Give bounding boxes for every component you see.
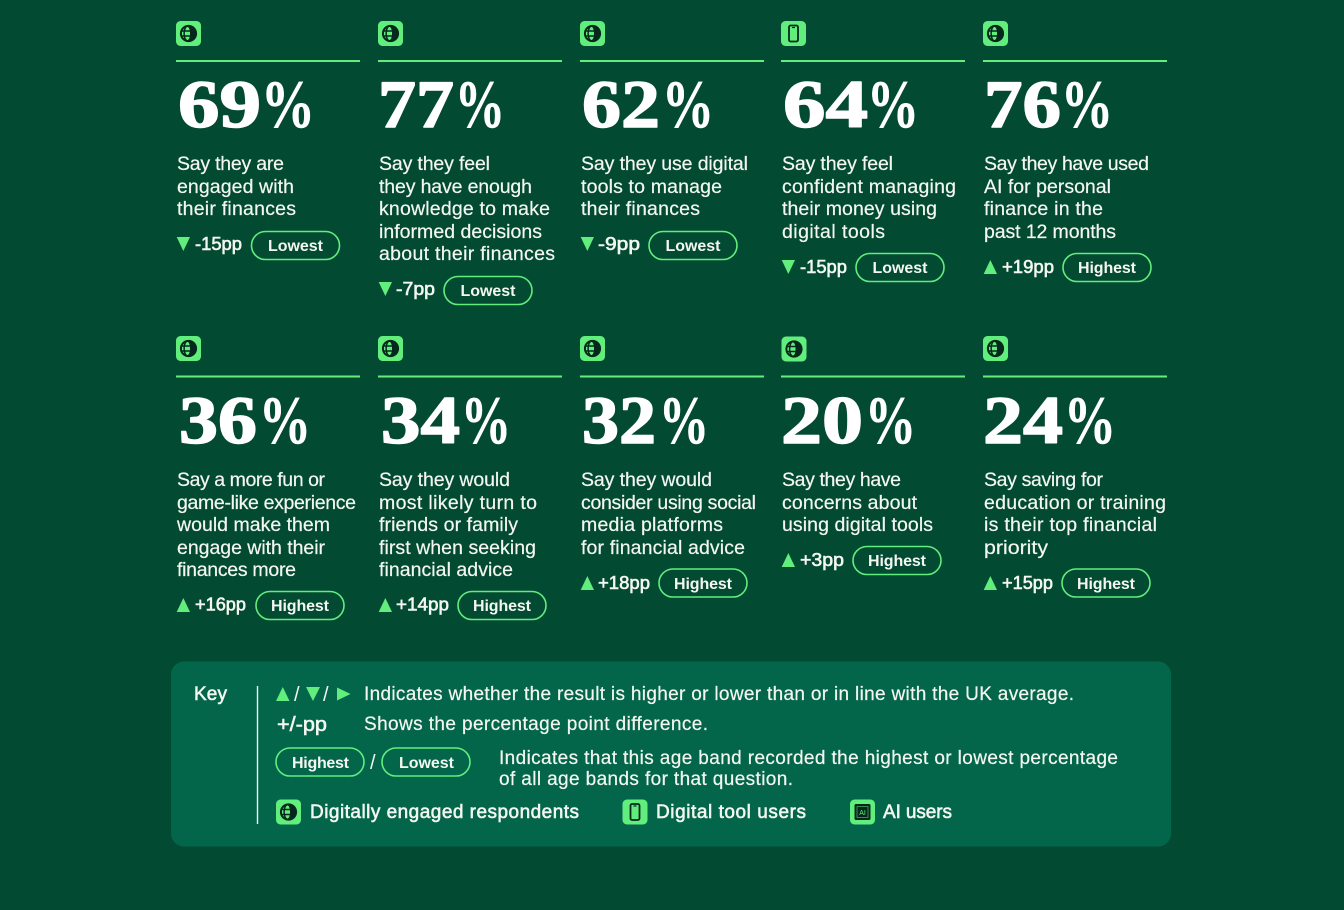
percentage: 34%: 34 (381, 382, 460, 458)
percentage: 34% (381, 382, 511, 458)
key text: badges: Indicates that this age band recorded the highest or lowest percentage (499, 748, 1118, 769)
badge: Lowest: Lowest (666, 238, 721, 255)
description: their finances (177, 198, 296, 220)
difference: +14pp: +14pp (396, 594, 449, 614)
percentage: 24% (983, 382, 1116, 458)
description: financial advice (379, 559, 513, 581)
key heading: Key (194, 684, 228, 705)
percentage: 20% (781, 382, 916, 458)
badge: Highest (853, 546, 941, 574)
badge: Lowest: Lowest (872, 260, 928, 277)
percentage: 64%: 64 (783, 66, 868, 142)
badge: Highest: Highest (271, 598, 330, 615)
difference: +15pp: +15pp (1002, 573, 1053, 593)
badge: Highest (659, 569, 747, 597)
badge: Lowest (649, 232, 737, 260)
stat card: 77% knowledge (378, 21, 562, 304)
difference: +19pp: +19pp (1002, 257, 1054, 277)
percentage: 77% (378, 66, 505, 142)
description (782, 153, 956, 243)
difference: +18pp: +18pp (598, 573, 650, 593)
badge: Lowest (444, 276, 532, 304)
stat card: 36% game-like (176, 336, 360, 620)
key text: badges (499, 748, 1118, 790)
badge: Highest (256, 592, 344, 620)
percentage: 32% (582, 382, 709, 458)
description (782, 469, 933, 536)
description: digital tools (782, 221, 885, 243)
stat card: 32% social media (580, 336, 764, 597)
badge: Highest: Highest (1078, 260, 1137, 277)
icon: globe (276, 800, 301, 824)
percentage: 32%: % (659, 382, 709, 458)
description: engage with their (177, 537, 326, 559)
stat card: 69% engaged (176, 21, 360, 260)
percentage: 36% (179, 382, 311, 458)
description: AI for personal (984, 176, 1111, 198)
description: their finances (581, 198, 700, 220)
badge: Highest: Highest (473, 598, 532, 615)
description: Say a more fun or (177, 469, 326, 491)
percentage: 34%: % (461, 382, 511, 458)
percentage: 36%: 36 (179, 382, 257, 458)
description: their money using (782, 198, 937, 220)
badge: Lowest: Lowest (399, 755, 455, 772)
separator slash: / (370, 752, 376, 774)
icon: globe (983, 336, 1008, 361)
description: informed decisions (379, 221, 542, 243)
percentage: 62%: 62 (582, 66, 660, 142)
difference: +3pp: +3pp (800, 550, 844, 570)
description: Say they use digital (581, 153, 748, 175)
description (581, 153, 748, 220)
description: engaged with (177, 176, 294, 198)
description: Say they are (177, 153, 284, 175)
description: past 12 months (984, 221, 1116, 243)
icon: arrows: / (294, 684, 300, 706)
legend label: digital tool users: Digital tool users (656, 802, 806, 823)
panel: key (171, 662, 1171, 846)
badge: Lowest (382, 748, 470, 776)
percentage: 20%: % (865, 382, 916, 458)
stat card: 62% digital tools (580, 21, 764, 260)
difference: -15pp: -15pp (195, 234, 242, 254)
badge: Highest (1063, 254, 1151, 282)
description: tools to manage (581, 176, 722, 198)
description: Say they have used (984, 153, 1149, 175)
description (984, 469, 1166, 559)
icon: arrows: / (323, 684, 329, 706)
description: priority (984, 537, 1048, 559)
icon: globe (580, 21, 605, 46)
description: confident managing (782, 176, 956, 198)
icon: globe (378, 21, 403, 46)
difference: +16pp: +16pp (195, 594, 246, 614)
description (379, 469, 537, 581)
badge: Highest: Highest (674, 576, 733, 593)
description: consider using social (581, 492, 756, 514)
description: friends or family (379, 514, 518, 536)
difference: +3pp (782, 550, 844, 570)
icon: phone (622, 800, 648, 824)
key text: badges: of all age bands for that question. (499, 769, 793, 790)
badge: Highest: Highest (292, 755, 350, 772)
stat card: 20% concerns (781, 336, 965, 574)
badge: Highest: Highest (1077, 576, 1136, 593)
icon: globe (782, 336, 806, 362)
icon: globe (378, 336, 403, 361)
percentage: 77%: % (455, 66, 505, 142)
description (176, 469, 356, 581)
description: using digital tools (782, 514, 933, 536)
icon: globe (983, 21, 1008, 46)
stat card: 64% confident (781, 21, 965, 282)
icon: phone (781, 21, 806, 46)
description: finance in the (984, 198, 1103, 220)
badge: Lowest (856, 254, 944, 282)
description: media platforms (581, 514, 723, 536)
percentage: 69%: 69 (178, 66, 261, 142)
difference: -7pp: -7pp (396, 279, 435, 299)
icon: AI chip (850, 800, 875, 824)
percentage: 76% (984, 66, 1113, 142)
description: Say they feel (782, 153, 893, 175)
description (177, 153, 296, 220)
percentage: 62% (582, 66, 714, 142)
percentage: 62%: % (662, 66, 714, 142)
percentage: 32%: 32 (582, 382, 656, 458)
badge: Highest (276, 748, 364, 776)
percentage: 24%: % (1064, 382, 1116, 458)
legend label: AI users: AI users (883, 802, 952, 823)
description: Say saving for (984, 469, 1104, 491)
description: Say they would (379, 469, 510, 491)
stat card: 76% AI use (983, 21, 1167, 282)
icon: globe (176, 336, 201, 361)
description: they have enough (379, 176, 532, 198)
badge: Lowest: Lowest (460, 283, 516, 300)
difference: -9pp: -9pp (598, 234, 640, 254)
badge: Highest (458, 592, 546, 620)
badge: Lowest (252, 232, 340, 260)
description: knowledge to make (379, 198, 550, 220)
stat card: 34% friends or family (378, 336, 562, 620)
description: game-like experience (177, 492, 356, 514)
description: would make them (176, 514, 330, 536)
key text: direction: Indicates whether the result is higher or lower than or in line with the UK average. (364, 684, 1074, 705)
percentage: 64%: % (867, 66, 919, 142)
difference: -7pp (379, 279, 435, 299)
legend label: digitally engaged: Digitally engaged respondents (310, 802, 579, 823)
icon: globe (176, 21, 201, 46)
description: Say they have (782, 469, 901, 491)
percentage: 77%: 77 (378, 66, 454, 142)
description (984, 153, 1149, 243)
percentage: 76%: 76 (984, 66, 1061, 142)
description (379, 153, 555, 265)
percentage: 69%: % (261, 66, 315, 142)
icon: globe (580, 336, 605, 361)
percentage: 76%: % (1061, 66, 1113, 142)
icon: arrows (276, 684, 350, 706)
percentage: 64% (783, 66, 919, 142)
percentage: 24%: 24 (983, 382, 1063, 458)
description: is their top financial (984, 514, 1157, 536)
description: Say they would (581, 469, 712, 491)
percentage: 36%: % (259, 382, 311, 458)
description (581, 469, 756, 559)
badge: Lowest: Lowest (268, 238, 324, 255)
description: education or training (984, 492, 1166, 514)
description: concerns about (782, 492, 918, 514)
percentage: 69% (178, 66, 315, 142)
difference: -15pp: -15pp (800, 257, 847, 277)
description: for financial advice (581, 537, 745, 559)
difference: -9pp (581, 234, 640, 254)
key symbol: pp: +/-pp (277, 714, 327, 736)
badge: Highest: Highest (868, 553, 927, 570)
description: finances more (177, 559, 296, 581)
description: about their finances (379, 243, 555, 265)
icon: AI chip: AI (859, 810, 866, 817)
percentage: 20%: 20 (781, 382, 863, 458)
description: Say they feel (379, 153, 490, 175)
badge: Highest (1062, 569, 1150, 597)
stat card: 24% education (983, 336, 1167, 597)
description: first when seeking (379, 537, 536, 559)
key text: pp: Shows the percentage point difference. (364, 714, 708, 735)
description: most likely turn to (379, 492, 537, 514)
